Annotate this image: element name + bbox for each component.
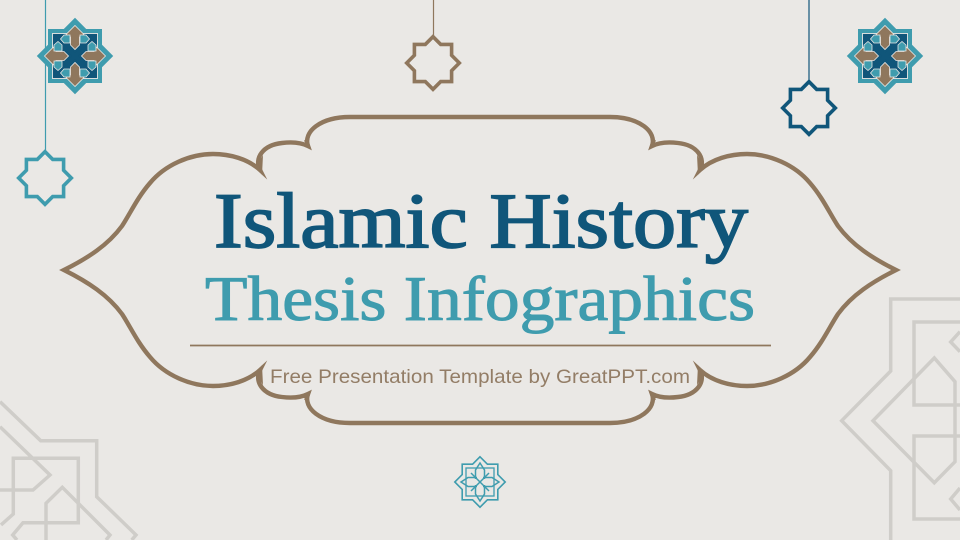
pattern: bottom-left geometric lattice [0, 402, 136, 540]
icon: outlined knot ornament bottom [455, 457, 505, 507]
tagline: Free Presentation Template by GreatPPT.com [270, 366, 690, 388]
subtitle: Thesis Infographics [205, 264, 755, 334]
pattern: bottom-right geometric lattice [842, 299, 960, 540]
icon: geometric ornament top right [847, 18, 923, 94]
divider rule [190, 344, 771, 346]
title: Islamic History [214, 177, 748, 264]
hanging star: brown centre [407, 0, 459, 89]
decorative arabesque frame [64, 117, 896, 423]
icon: geometric ornament top left [37, 18, 113, 94]
hanging star: teal left [19, 0, 71, 204]
hanging star: navy right [783, 0, 835, 134]
